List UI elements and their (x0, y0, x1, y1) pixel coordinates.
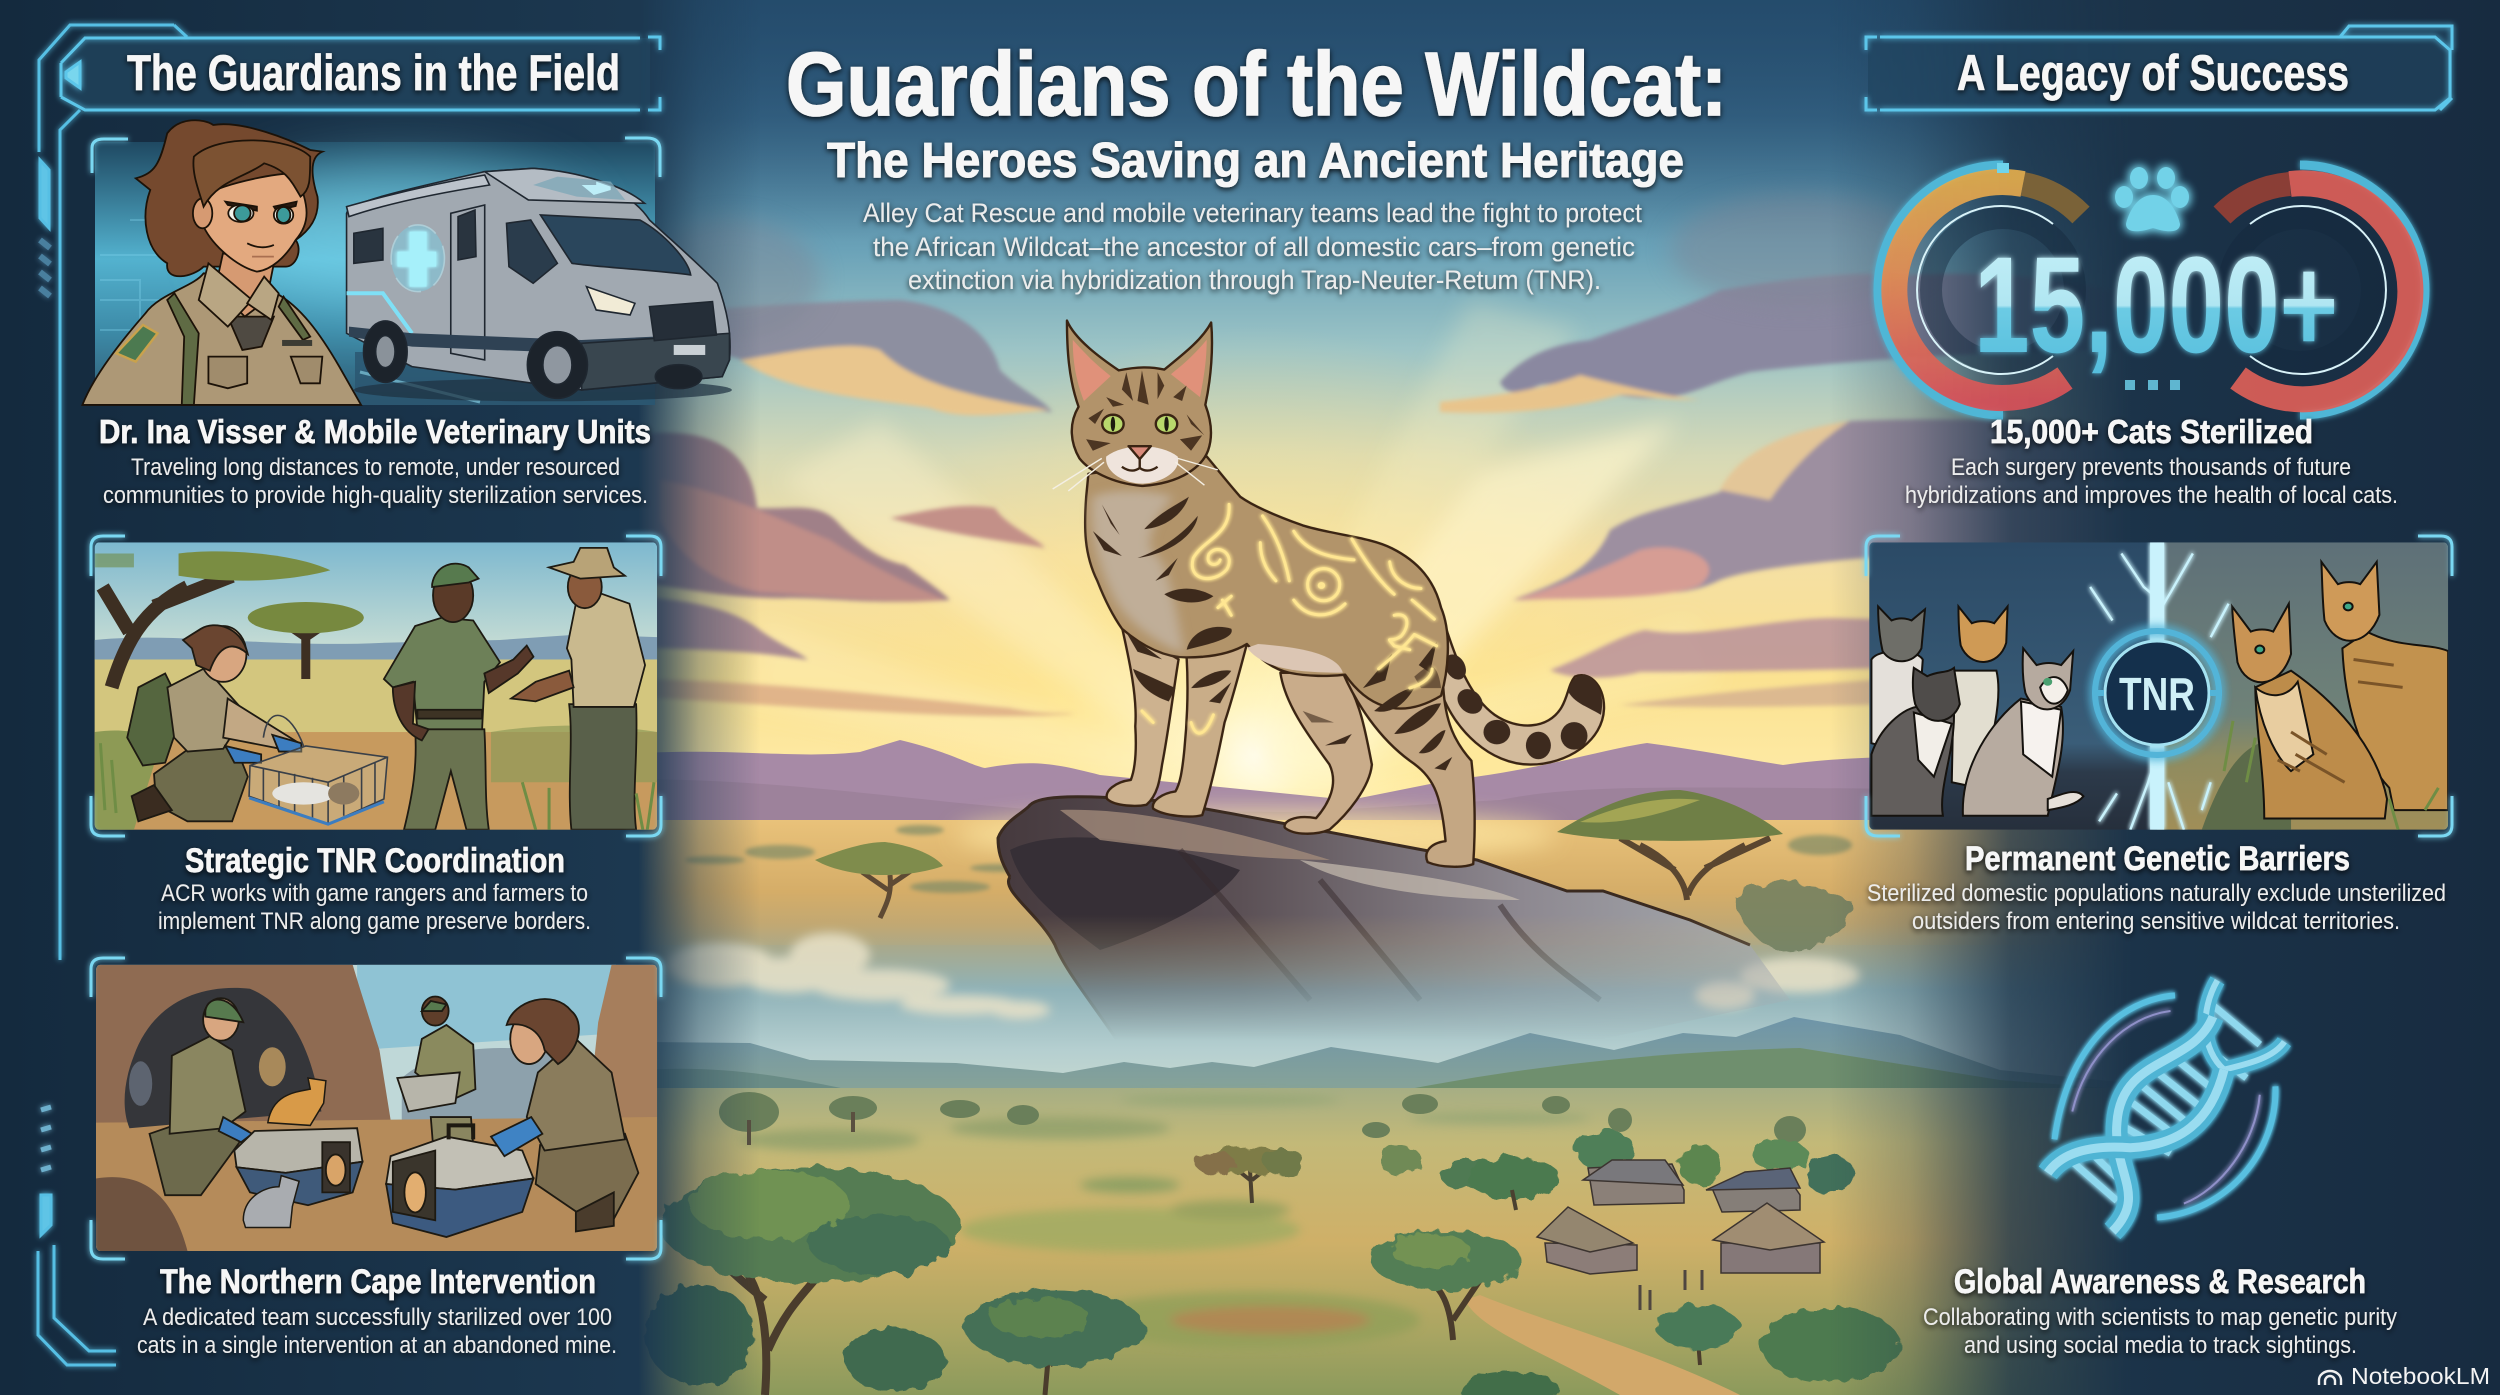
intro paragraph: extinction via hybridization through Trap-Neuter-Retum (TNR). (908, 265, 1601, 295)
TNR emblem (2093, 631, 2222, 755)
foreground trees (645, 1167, 1900, 1395)
subtitle: The Heroes Saving an Ancient Heritage (827, 134, 1684, 188)
caption: permanent genetic barriers: outsiders from entering sensitive wildcat territories. (1912, 908, 2400, 935)
caption: cats sterilized: hybridizations and improves the health of local cats. (1905, 482, 2398, 509)
wire trap cage (249, 715, 387, 824)
village huts (1537, 1160, 1824, 1310)
kneeling technician (127, 625, 301, 821)
right section header: A Legacy of Success (1957, 45, 2349, 101)
caption: Dr. Ina Visser: Dr. Ina Visser & Mobile Veterinary Units (99, 413, 651, 450)
illustration: mobile veterinary van (347, 168, 732, 401)
NotebookLM watermark: NotebookLM (2351, 1363, 2490, 1389)
caption: Northern Cape intervention: A dedicated team successfully starilized over 100 (143, 1304, 612, 1331)
big number: 15,000+ (1974, 229, 2338, 382)
panel: TNR genetic barrier (1866, 536, 2452, 836)
caption: global awareness and research: and using social media to track sightings. (1964, 1332, 2357, 1359)
body (1085, 456, 1448, 708)
caption: cats sterilized: Each surgery prevents thousands of future (1951, 454, 2351, 481)
caption: Dr. Ina Visser: Traveling long distances to remote, under resourced (131, 454, 620, 481)
acacia trees (103, 576, 330, 687)
lower mountains (0, 1017, 2200, 1120)
caption: permanent genetic barriers: Permanent Genetic Barriers (1965, 840, 2350, 878)
caption: Dr. Ina Visser (99, 413, 651, 509)
distant trees (719, 1092, 1806, 1145)
grey cat (243, 1176, 299, 1228)
status dots (2125, 380, 2180, 390)
panel: Dr. Ina Visser and mobile vet unit (82, 120, 732, 405)
right section header (1866, 26, 2452, 110)
intro paragraph (863, 198, 1642, 295)
caption: Northern Cape intervention: The Northern Cape Intervention (160, 1263, 596, 1301)
left section header (61, 37, 660, 110)
dark tabby stripes (1093, 497, 1452, 770)
caption: global awareness and research: Global Awareness & Research (1954, 1263, 2366, 1301)
mid acacia group (1195, 1130, 1855, 1210)
field team left (150, 998, 252, 1195)
left clouds (600, 300, 1075, 716)
caption: Northern Cape intervention (137, 1263, 617, 1359)
icon: paw print (2115, 167, 2189, 231)
intro paragraph: the African Wildcat–the ancestor of all domestic cars–from genetic (873, 232, 1635, 262)
road (1465, 1295, 1740, 1395)
panel: Strategic TNR coordination (91, 536, 661, 836)
acacia tree left (815, 842, 943, 918)
title block: Guardians of the Wildcat: (786, 35, 1727, 135)
far hind leg (1280, 673, 1372, 834)
lower sky with clouds (0, 945, 2500, 1095)
left dial (1878, 163, 2081, 415)
ranger in hat (511, 548, 645, 830)
stat gauge: 15,000+ (1878, 163, 2425, 415)
caption: permanent genetic barriers: Sterilized domestic populations naturally exclude unsterilized (1867, 880, 2446, 907)
panel: Northern Cape intervention (91, 958, 661, 1259)
near hind leg (1343, 654, 1475, 867)
domestic cats (1871, 606, 2083, 816)
left frame ornament (38, 25, 187, 1365)
head (1053, 321, 1218, 491)
bush behind rock (1733, 882, 1852, 950)
pet carrier one (234, 1128, 362, 1205)
caption: Strategic TNR coordination (158, 842, 591, 935)
front legs (1107, 627, 1247, 816)
left section header: The Guardians in the Field (127, 45, 620, 101)
caption: cats sterilized (1905, 413, 2398, 509)
middle ranger with crate (397, 997, 475, 1145)
glowing gold markings (1142, 504, 1437, 733)
caption: Strategic TNR coordination: ACR works with game rangers and farmers to (161, 880, 588, 907)
caption: permanent genetic barriers (1867, 840, 2446, 935)
pet carrier two (386, 1125, 533, 1237)
sun rays (740, 300, 1720, 790)
caption: global awareness and research (1923, 1263, 2397, 1359)
caption: Northern Cape intervention: cats in a single intervention at an abandoned mine. (137, 1332, 617, 1359)
intro paragraph: Alley Cat Rescue and mobile veterinary teams lead the fight to protect (863, 198, 1642, 228)
orange cat on carrier (268, 1078, 326, 1125)
field team right (491, 999, 638, 1231)
right column dark panel (1830, 0, 2500, 1395)
caption: cats sterilized: 15,000+ Cats Sterilized (1990, 413, 2313, 450)
hero cat with glowing markings (1053, 321, 1604, 867)
rock outcrop (998, 797, 1790, 1060)
illustration: Dr. Ina Visser (82, 120, 361, 405)
right clouds (1440, 274, 2150, 707)
sun glow (826, 325, 1686, 1185)
acacia tree right (1557, 790, 1783, 900)
TNR emblem: TNR (2119, 668, 2195, 720)
icon: DNA helix (2048, 980, 2284, 1231)
left column dark panel (0, 0, 760, 1395)
tail (1441, 627, 1604, 765)
lightning barrier (2090, 542, 2229, 830)
wildcats (2232, 562, 2448, 819)
top side clouds (640, 195, 1930, 340)
sunset mountains (600, 740, 2200, 830)
right dial (2222, 165, 2425, 415)
golden plain (0, 820, 2500, 950)
caption: Dr. Ina Visser: communities to provide high-quality sterilization services. (103, 482, 648, 509)
title block (786, 35, 1727, 295)
ranger in green (384, 564, 533, 830)
caption: Strategic TNR coordination: implement TNR along game preserve borders. (158, 908, 591, 935)
savanna plain (0, 1088, 2500, 1395)
caption: global awareness and research: Collaborating with scientists to map genetic purity (1923, 1304, 2397, 1331)
caption: Strategic TNR coordination: Strategic TNR Coordination (185, 842, 565, 880)
